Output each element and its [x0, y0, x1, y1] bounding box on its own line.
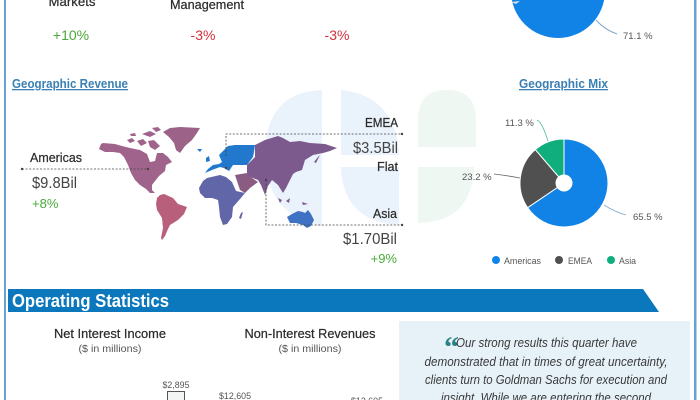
callout: Asia: [343, 207, 397, 266]
chart title: Non-Interest Revenues: Non-Interest Revenues: [244, 327, 376, 341]
pie chart: geographic mix: 11.3 %: [505, 118, 534, 129]
map: Greenland: [163, 127, 200, 153]
map: North America: [99, 143, 172, 193]
callout: Americas: +8%: [32, 196, 59, 211]
quote panel: [399, 321, 690, 400]
heading: Geographic Revenue: Geographic Revenue: [12, 76, 128, 91]
callout: Asia: +9%: [371, 251, 397, 266]
callout: EMEA: EMEA: [365, 116, 399, 130]
chart title: Non-Interest Revenues: [244, 327, 376, 355]
pie chart: geographic mix: [462, 118, 663, 227]
banner: Operating Statistics: Operating Statistics: [12, 291, 169, 311]
segment labels: revenue by business line: -3%: [191, 27, 215, 43]
bar chart: net interest income: $2,895: [162, 380, 190, 390]
callout: Americas: $9.8Bil: [32, 175, 77, 192]
map: Japan and islands: [278, 155, 320, 205]
pie chart: geographic mix: 65.5 %: [633, 212, 663, 223]
map: Madagascar: [239, 212, 243, 219]
callout: Americas: Americas: [30, 151, 82, 165]
pie legend: [492, 256, 637, 267]
segment labels: revenue by business line: +10%: [53, 27, 89, 43]
bar chart: non-interest revenues: [219, 391, 383, 400]
map: South America: [156, 194, 187, 240]
segment labels: revenue by business line: [48, 0, 349, 43]
map: Africa: [199, 175, 245, 225]
world map: [99, 127, 337, 240]
map: Australia: [287, 210, 314, 228]
bar chart: net interest income: [162, 380, 190, 400]
top pie chart: [511, 0, 653, 42]
pie chart: geographic mix: 23.2 %: [462, 172, 492, 183]
map: Middle East: [235, 173, 258, 193]
callout: EMEA: Flat: [377, 160, 399, 174]
chart title: Non-Interest Revenues: ($ in millions): [278, 343, 342, 355]
connector lines: [21, 133, 403, 226]
pie legend: Americas: [504, 256, 541, 267]
pie legend: EMEA: [568, 256, 593, 267]
chart title: Net Interest Income: Net Interest Income: [54, 327, 166, 341]
heading: Geographic Mix: Geographic Mix: [519, 76, 609, 91]
callout: Asia: $1.70Bil: [343, 231, 397, 248]
callout: Americas: [30, 151, 82, 211]
map: Arctic islands: [127, 127, 161, 150]
quote text: clients turn to Goldman Sachs for execution and: [425, 373, 668, 387]
pie legend: Asia: [619, 256, 637, 267]
quote text: Our strong results this quarter have: [456, 336, 637, 350]
map: Asia: [247, 136, 337, 195]
callout: EMEA: [353, 116, 399, 174]
map: Europe: [205, 145, 255, 173]
quote text: [424, 336, 668, 400]
banner: Operating Statistics: [8, 289, 659, 312]
quote text: demonstrated that in times of great uncertainty,: [424, 355, 668, 369]
segment labels: revenue by business line: -3%: [325, 27, 349, 43]
callout: EMEA: $3.5Bil: [353, 140, 398, 157]
map: UK and Iceland: [197, 149, 210, 162]
watermark logo: [265, 90, 476, 226]
top pie chart: 71.1 %: [623, 31, 653, 42]
callout: Asia: Asia: [373, 207, 397, 221]
chart title: Net Interest Income: [54, 327, 166, 355]
chart title: Net Interest Income: ($ in millions): [78, 343, 142, 355]
quote mark: “: [444, 331, 459, 364]
